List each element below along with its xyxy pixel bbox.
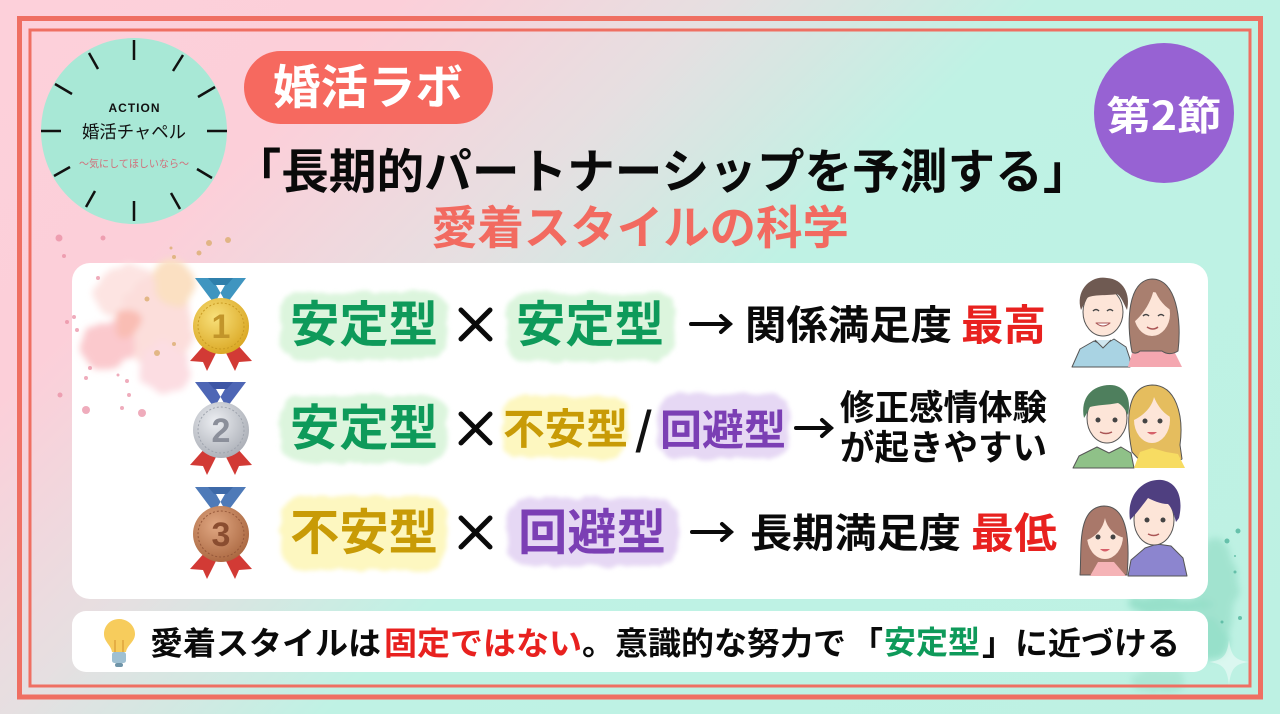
title: 「長期的パートナーシップを予測する」 [234,146,1090,200]
highlight: anxious [503,396,627,458]
main panel [72,263,1208,599]
couple 3 [1080,480,1187,576]
medal 1 [190,278,252,371]
highlight: secure [280,395,447,463]
watercolor splash: top left [56,234,231,417]
medal 1: 1 [212,308,230,346]
result text: 関係満足度 [745,304,952,348]
note text: approach: 」に近づける [982,626,1180,662]
logo badge: ～気にしてほしいなら～ [79,157,189,170]
multiply sign [461,310,490,339]
highlight: secure [507,293,675,361]
label: anxious: 不安型 [503,406,628,453]
note panel [72,611,1208,672]
medal 2 [190,382,252,475]
medal 3 [190,487,252,579]
result text: 修正感情体験 [840,389,1047,428]
highlight: secure [280,292,447,360]
note text: effort: 。意識的な努力で [582,626,846,662]
logo badge [41,38,227,224]
medal 2: 2 [212,412,230,450]
label: secure: 安定型 [516,298,664,352]
watercolor splash: bottom right [1128,528,1242,694]
opening bracket: 「 [851,626,883,662]
medal 3: 3 [212,516,230,554]
multiply sign [461,518,490,547]
result emphasis: 最低 [971,510,1057,557]
label: secure: 安定型 [290,402,438,456]
slash: / [635,400,652,465]
result emphasis: 最高 [961,302,1046,349]
row 3 [190,480,1187,579]
row 1 [190,278,1182,371]
section badge: 第2節 [1106,84,1222,142]
couple 2 [1073,385,1185,468]
result text: 長期満足度 [750,512,961,556]
section badge [1094,43,1234,183]
subtitle: 愛着スタイルの科学 [431,202,849,254]
icon: light bulb [104,619,135,667]
couple 1 [1072,278,1182,367]
label: anxious: 不安型 [290,506,438,560]
highlight: avoidant [508,498,678,566]
row 2 [190,382,1185,475]
arrow [796,420,831,436]
highlight: anxious [281,496,447,570]
result text line 2: が起きやすい [840,429,1047,468]
label: secure: 安定型 [290,298,438,352]
logo badge: 婚活チャペル [82,122,186,142]
note emphasis: not fixed: 固定ではない [384,626,582,662]
note text: 愛着スタイルは [150,626,381,662]
multiply sign [461,414,490,443]
label: avoidant: 回避型 [518,506,666,560]
tag pill [244,51,493,124]
note emphasis: secure: 安定型 [884,624,980,660]
tag pill: 婚活ラボ [273,61,463,114]
logo badge: ACTION [108,101,160,115]
label: avoidant: 回避型 [660,407,786,454]
highlight: avoidant [658,394,789,458]
arrow [692,524,731,540]
sparkle [1209,640,1249,685]
arrow [691,316,730,332]
